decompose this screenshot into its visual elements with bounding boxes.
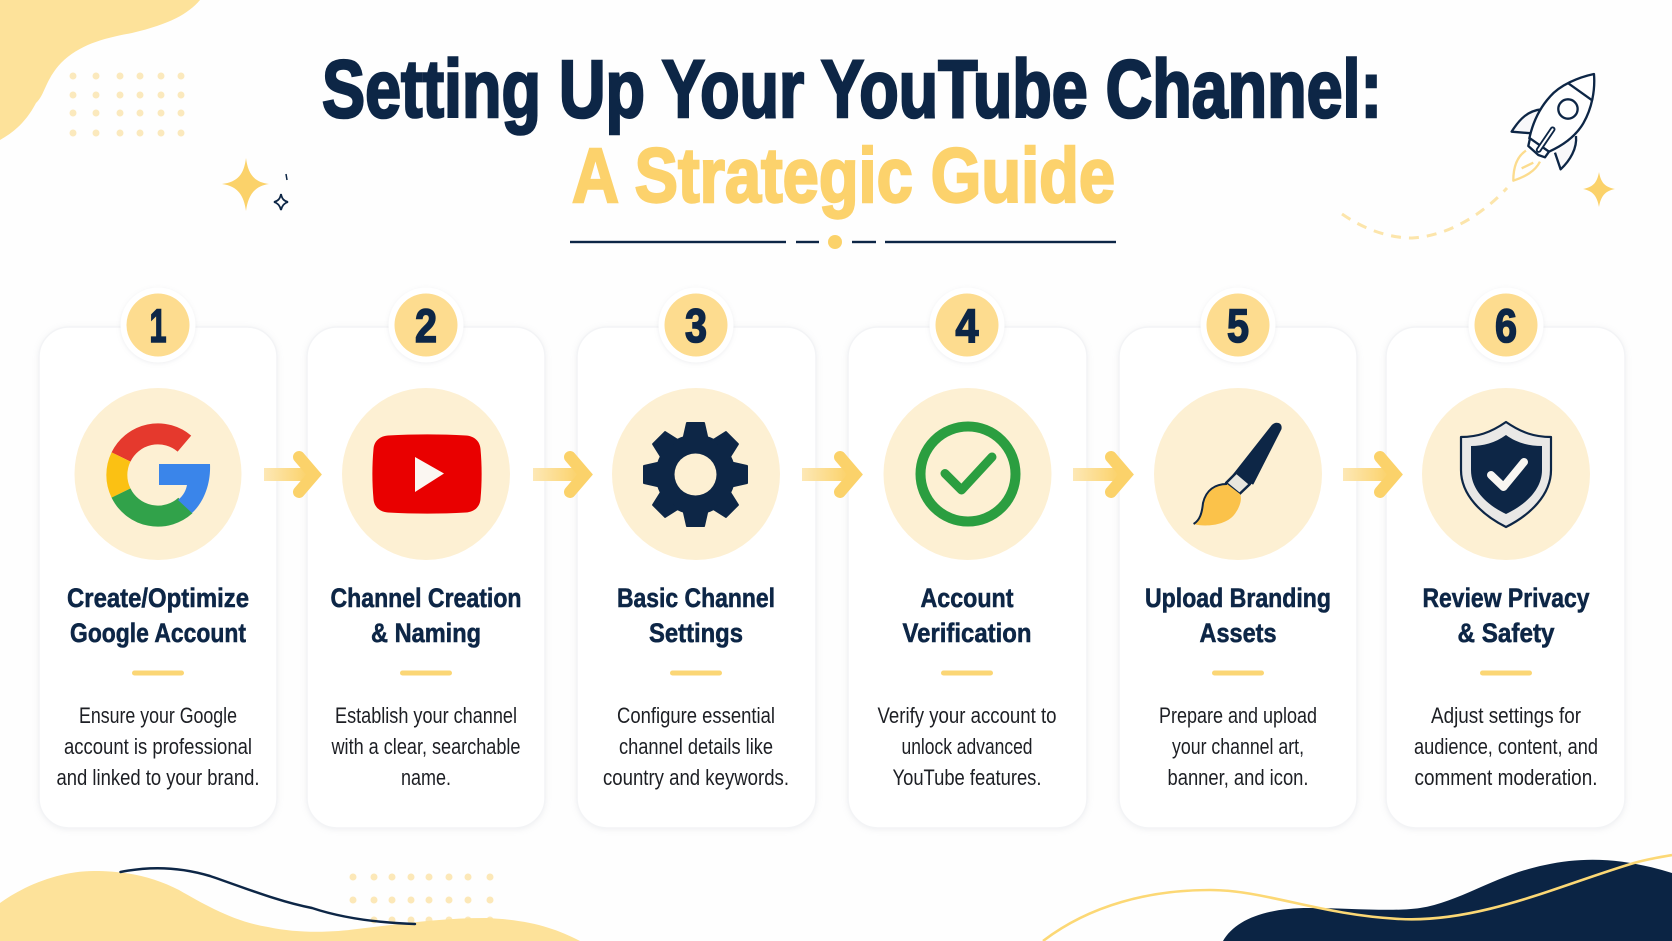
arrow: step 1 to 2 — [264, 457, 314, 492]
panel: step 2 — [307, 288, 545, 828]
number badge 6 — [1468, 288, 1544, 362]
step 4 description: YouTube features. — [892, 765, 1042, 790]
number badge 2: 2 — [415, 299, 437, 352]
step 2 heading: Channel Creation — [330, 583, 522, 613]
step 6 description: comment moderation. — [1414, 765, 1598, 790]
step 3 description: Configure essential — [617, 703, 775, 728]
icon: sparkles top left — [222, 158, 288, 211]
arrow: step 5 to 6 — [1343, 457, 1395, 492]
arrow: step 3 to 4 — [802, 457, 855, 492]
step 1 description — [56, 703, 260, 790]
arrow: step 2 to 3 — [533, 457, 585, 492]
dot grid: bottom — [350, 874, 494, 924]
step 3 heading: Basic Channel — [617, 583, 775, 613]
step 1 description: and linked to your brand. — [56, 765, 260, 790]
number badge 3 — [658, 288, 734, 362]
step 3 heading — [617, 583, 775, 648]
step 3 description: country and keywords. — [603, 765, 789, 790]
step 6 heading — [1422, 583, 1590, 648]
panel: step 6 — [1386, 288, 1625, 828]
number badge 1: 1 — [150, 299, 166, 352]
step 5 description: your channel art, — [1172, 734, 1304, 759]
number badge 4: 4 — [956, 299, 978, 352]
title line 2: A Strategic Guide — [572, 133, 1115, 219]
icon: green check circle — [884, 388, 1052, 560]
step 4 heading — [902, 583, 1032, 648]
step 2 heading: & Naming — [371, 618, 481, 648]
arrow: step 4 to 5 — [1073, 457, 1126, 492]
dot grid: top left — [70, 72, 184, 136]
step 6 description: Adjust settings for — [1431, 703, 1581, 728]
step 1 heading: Google Account — [70, 618, 246, 648]
number badge 6: 6 — [1495, 299, 1517, 352]
panel: step 4 — [848, 288, 1087, 828]
decorative blob: top left — [0, 0, 200, 140]
number badge 1 — [120, 288, 196, 362]
icon: paint brush — [1154, 388, 1322, 560]
step 1 description: account is professional — [64, 734, 252, 759]
decorative blob: bottom right navy — [1223, 860, 1672, 941]
step 1 heading: Create/Optimize — [67, 583, 249, 613]
icon: shield with check — [1422, 388, 1590, 560]
step 5 description: Prepare and upload — [1159, 703, 1317, 728]
step 4 heading: Verification — [902, 618, 1032, 648]
step 3 heading: Settings — [649, 618, 743, 648]
title divider — [570, 235, 1116, 249]
step 4 description: Verify your account to — [878, 703, 1056, 728]
panel: step 1 — [39, 288, 277, 828]
step 6 heading: & Safety — [1458, 618, 1555, 648]
step 3 description: channel details like — [619, 734, 773, 759]
step 5 heading — [1145, 583, 1331, 648]
title — [322, 44, 1382, 219]
decorative blob: bottom left — [0, 871, 580, 941]
step 4 description: unlock advanced — [902, 734, 1032, 759]
step 1 heading — [67, 583, 249, 648]
panel: step 5 — [1119, 288, 1357, 828]
step 6 heading: Review Privacy — [1422, 583, 1590, 613]
rocket dashed trail — [1342, 188, 1507, 238]
decorative curve: navy line bottom left — [120, 868, 415, 924]
step 1 description: Ensure your Google — [79, 703, 237, 728]
step 5 description — [1159, 703, 1317, 790]
step 5 description: banner, and icon. — [1168, 765, 1308, 790]
step 4 description — [878, 703, 1056, 790]
number badge 5: 5 — [1227, 299, 1249, 352]
step 5 heading: Assets — [1200, 618, 1276, 648]
step 2 heading — [330, 583, 522, 648]
step 2 description: with a clear, searchable — [331, 734, 520, 759]
decorative curve: yellow line bottom right — [1043, 855, 1672, 941]
step 2 description: Establish your channel — [335, 703, 517, 728]
number badge 5 — [1200, 288, 1276, 362]
title line 1: Setting Up Your YouTube Channel: — [322, 44, 1382, 135]
step 2 description: name. — [401, 765, 451, 790]
number badge 4 — [930, 288, 1004, 362]
icon: gear — [612, 388, 780, 560]
step 3 description — [603, 703, 789, 790]
panel: step 3 — [577, 288, 816, 828]
step 6 description: audience, content, and — [1414, 734, 1598, 759]
icon: Google G — [74, 388, 242, 560]
icon: rocket — [1512, 74, 1594, 181]
step 6 description — [1414, 703, 1598, 790]
step 4 heading: Account — [920, 583, 1014, 613]
number badge 2 — [388, 288, 464, 362]
icon: YouTube play button — [342, 388, 510, 560]
number badge 3: 3 — [685, 299, 707, 352]
step 2 description — [331, 703, 520, 790]
step 5 heading: Upload Branding — [1145, 583, 1331, 613]
icon: sparkle top right — [1583, 172, 1615, 207]
